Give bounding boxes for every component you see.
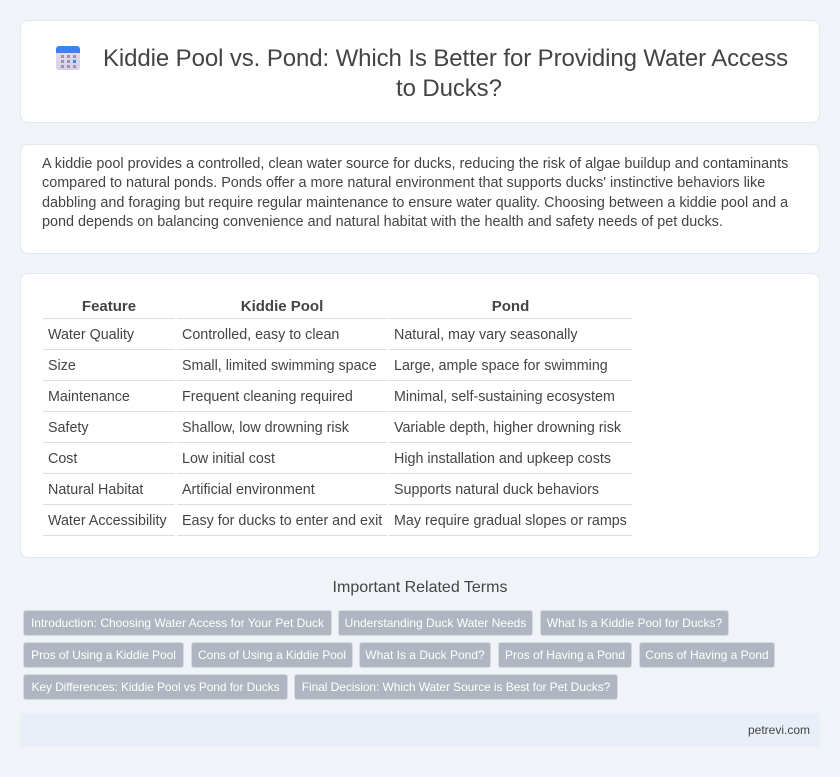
table: Frequent cleaning required	[182, 389, 353, 405]
related term tags: Introduction: Choosing Water Access for Your Pet Duck	[31, 616, 324, 630]
heading: related terms: Important Related Terms	[333, 579, 507, 596]
table: Minimal, self-sustaining ecosystem	[394, 389, 615, 405]
related term tags: What Is a Kiddie Pool for Ducks?	[547, 616, 722, 630]
table: Size	[48, 358, 76, 374]
title: Kiddie Pool vs. Pond: Which Is Better for Providing Water Access	[103, 45, 788, 72]
related term tags: Pros of Using a Kiddie Pool	[31, 648, 176, 662]
table: High installation and upkeep costs	[394, 451, 611, 467]
related term tags: Pros of Having a Pond	[505, 648, 625, 662]
table: Controlled, easy to clean	[182, 327, 339, 343]
table: Maintenance	[48, 389, 130, 405]
intro text	[42, 156, 788, 230]
table	[43, 298, 632, 536]
intro text: pond depends on balancing convenience and natural habitat with the health and safety needs of pet ducks.	[42, 214, 723, 230]
related term tags: Understanding Duck Water Needs	[345, 616, 526, 630]
table: Safety	[48, 420, 89, 436]
table: Variable depth, higher drowning risk	[394, 420, 621, 436]
table: Artificial environment	[182, 482, 315, 498]
table: Kiddie Pool	[241, 298, 323, 315]
table: Water Accessibility	[48, 513, 167, 529]
table: Shallow, low drowning risk	[182, 420, 349, 436]
intro text: dabbling and foraging but require regular maintenance to ensure water quality. Choosing between a kiddie pool and a	[42, 195, 788, 211]
panel: comparison table	[20, 273, 820, 558]
related term tags	[23, 610, 775, 700]
table: Water Quality	[48, 327, 134, 343]
title: to Ducks?	[396, 75, 502, 102]
table: Large, ample space for swimming	[394, 358, 608, 374]
related term tags: Key Differences: Kiddie Pool vs Pond for Ducks	[32, 680, 279, 694]
related term tags: Cons of Using a Kiddie Pool	[198, 648, 346, 662]
table: Low initial cost	[182, 451, 275, 467]
table: May require gradual slopes or ramps	[394, 513, 627, 529]
table: Natural, may vary seasonally	[394, 327, 578, 343]
intro text: compared to natural ponds. Ponds offer a more natural environment that supports ducks' instinctive behaviors like	[42, 175, 765, 191]
table: Supports natural duck behaviors	[394, 482, 599, 498]
title	[103, 45, 788, 102]
table: Cost	[48, 451, 77, 467]
table: Natural Habitat	[48, 482, 143, 498]
icon: calendar	[56, 46, 80, 70]
table: Easy for ducks to enter and exit	[182, 513, 382, 529]
related term tags: Cons of Having a Pond	[645, 648, 769, 662]
footer bar	[20, 713, 820, 747]
related term tags: Final Decision: Which Water Source is Best for Pet Ducks?	[302, 680, 610, 694]
related term tags: What Is a Duck Pond?	[365, 648, 485, 662]
intro text: A kiddie pool provides a controlled, clean water source for ducks, reducing the risk of algae buildup and contaminants	[42, 156, 788, 172]
panel: intro	[20, 144, 820, 254]
footer source: petrevi.com	[748, 723, 810, 737]
panel: header	[20, 20, 820, 123]
table: Pond	[492, 298, 529, 315]
table: Small, limited swimming space	[182, 358, 377, 374]
table: Feature	[82, 298, 136, 315]
